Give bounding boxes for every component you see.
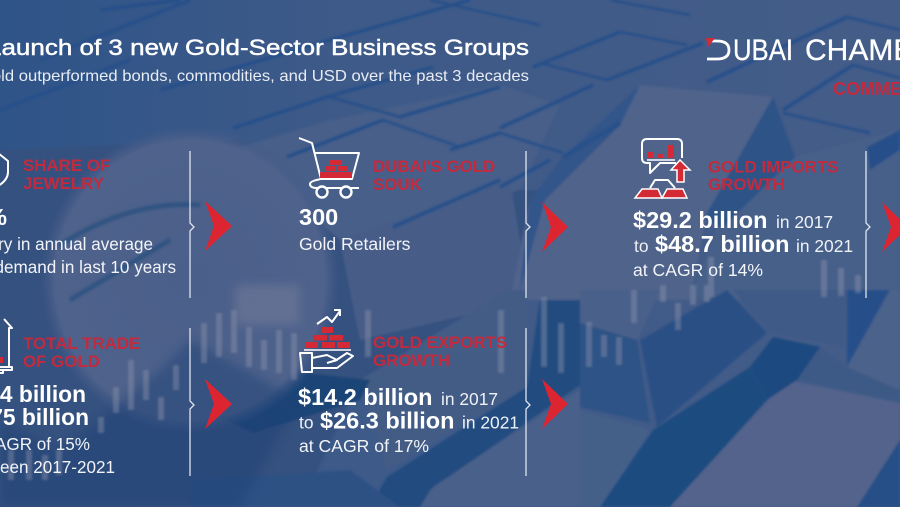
- bar gaps: [0, 0, 900, 227]
- globe: [40, 125, 340, 435]
- heading: Dubai's gold souk: DUBAI'S GOLD: [373, 157, 495, 176]
- heading: gold imports growth: GOLD IMPORTS: [708, 158, 838, 176]
- heading: gold exports growth: GOLD EXPORTS: [373, 333, 507, 352]
- icon: gold exports: [300, 310, 353, 372]
- stat: exports values: in 2017: [441, 389, 498, 409]
- dark lower-left sweep: [0, 340, 300, 507]
- icon: shopping cart: [299, 138, 359, 198]
- heading: gold imports growth: GROWTH: [708, 175, 785, 194]
- icon: gold imports: [635, 139, 690, 198]
- stat: imports values: at CAGR of 14%: [633, 260, 763, 280]
- title: Launch of 3 new Gold-Sector Business Groups: [0, 35, 529, 60]
- stat: imports values: in 2021: [796, 236, 853, 256]
- candlestick chart overlay: [8, 257, 861, 480]
- arrow 1: [205, 201, 232, 251]
- heading: Dubai's gold souk: SOUK: [373, 175, 423, 194]
- stat: exports values: in 2021: [462, 412, 519, 432]
- panel: gold imports growth: [633, 139, 853, 280]
- arrow 4: [205, 379, 232, 429]
- stat: imports values: $48.7 billion: [655, 231, 790, 257]
- stat: imports values: to: [634, 236, 649, 256]
- stat: imports values: in 2017: [776, 212, 833, 232]
- arrow 2: [542, 202, 568, 252]
- stat: exports values: $26.3 billion: [320, 408, 455, 434]
- heading: total trade of gold: OF GOLD: [23, 352, 100, 371]
- panel: total trade of gold: [0, 319, 140, 477]
- icon: trade arrow: [0, 319, 12, 373]
- arrow 3: [882, 202, 900, 252]
- divider 1: [190, 151, 194, 298]
- logo: Dubai Chambers: [706, 34, 900, 99]
- panel: share of jewelry: [0, 153, 176, 277]
- divider 3: [866, 151, 870, 298]
- stat: exports values: $14.2 billion: [298, 384, 433, 410]
- panel: gold exports growth: [298, 310, 519, 456]
- logo: Dubai Chambers: UBAI: [733, 34, 793, 67]
- stat: 300: 300: [299, 204, 338, 230]
- stat: exports values: at CAGR of 17%: [299, 436, 429, 456]
- heading: share of jewelry: JEWELRY: [23, 174, 104, 193]
- arrow 5: [542, 379, 568, 429]
- heading: gold exports growth: GROWTH: [373, 351, 450, 370]
- divider 5: [526, 328, 530, 476]
- icon: shield: [0, 153, 8, 186]
- stat: imports values: $29.2 billion: [633, 207, 768, 233]
- text: gold retailers: Gold Retailers: [299, 234, 411, 254]
- divider 4: [190, 328, 194, 476]
- divider 2: [526, 151, 530, 298]
- heading: total trade of gold: TOTAL TRADE: [23, 334, 140, 353]
- panel: Dubai's gold souk: [299, 138, 495, 254]
- stat: exports values: to: [299, 412, 314, 432]
- heading: share of jewelry: SHARE OF: [23, 156, 110, 175]
